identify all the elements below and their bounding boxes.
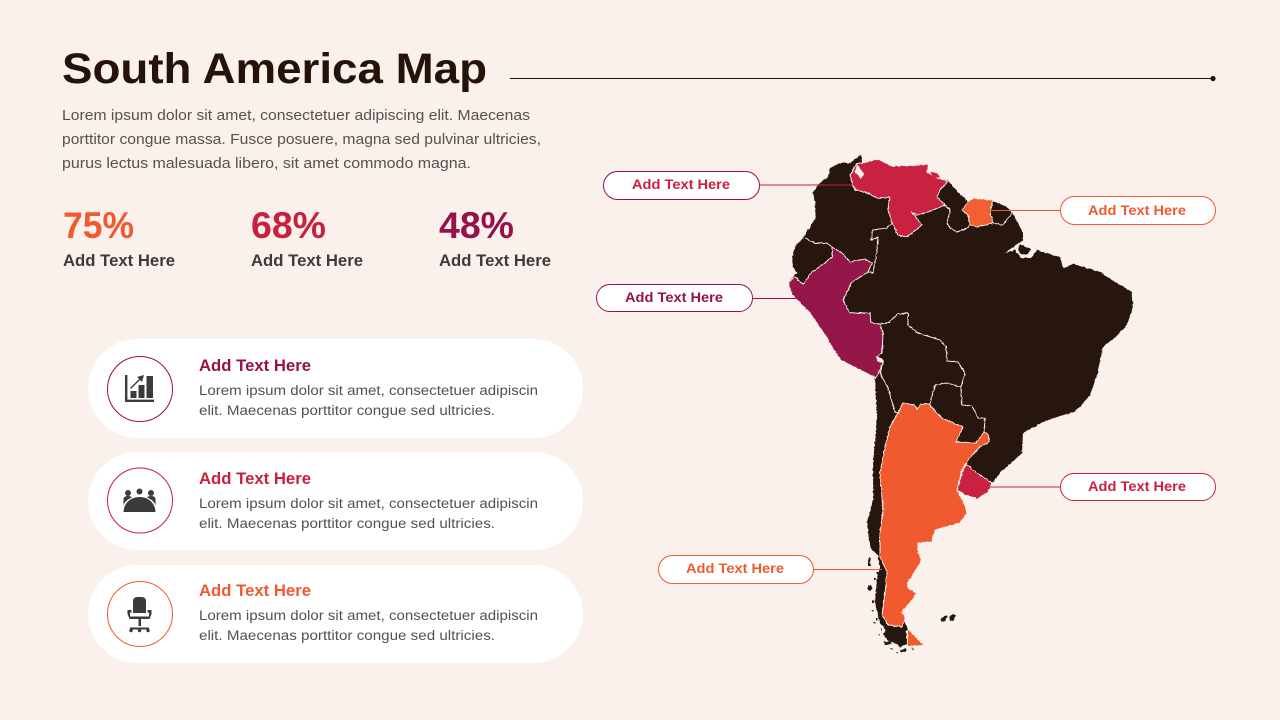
callout: Peru: Add Text Here <box>625 289 723 305</box>
Plate estuary <box>990 470 1003 487</box>
title: South America Map <box>62 45 487 93</box>
callout: Venezuela: Add Text Here <box>632 176 730 192</box>
country: Argentina <box>880 403 989 627</box>
map: South America <box>788 154 1133 654</box>
country borders <box>805 205 1012 432</box>
callout: Argentina <box>658 556 882 584</box>
stat: 68% <box>251 205 363 270</box>
intro paragraph: Lorem ipsum dolor sit amet, consectetuer adipiscing elit. Maecenas <box>62 108 530 124</box>
intro paragraph: purus lectus malesuada libero, sit amet commodo magna. <box>62 156 471 172</box>
Lake Titicaca <box>876 356 884 363</box>
continent silhouette <box>788 154 1133 632</box>
callout: Argentina: Add Text Here <box>686 560 784 576</box>
stat: 75%: 75% <box>63 205 134 246</box>
icon: bar chart <box>108 356 172 422</box>
title rule with end dot <box>510 76 1216 81</box>
card one text: Lorem ipsum dolor sit amet, consectetuer adipiscin <box>199 383 538 398</box>
intro paragraph: porttitor congue massa. Fusce posuere, magna sed pulvinar ultricies, <box>62 132 541 148</box>
intro paragraph <box>62 108 541 172</box>
callout: Suriname <box>991 196 1216 224</box>
southern islands <box>867 557 914 654</box>
country: Peru <box>788 247 883 378</box>
stat: 75% <box>63 205 175 270</box>
card one heading: Add Text Here <box>199 356 311 375</box>
card two text: Lorem ipsum dolor sit amet, consectetuer adipiscin <box>199 496 538 511</box>
stat: 68%: 68% <box>251 205 326 246</box>
Lake Maracaibo <box>855 164 864 179</box>
card two heading: Add Text Here <box>199 469 311 488</box>
stat: 75%: Add Text Here <box>63 251 175 270</box>
Trinidad <box>930 172 940 178</box>
Falkland Islands <box>941 614 956 622</box>
country: Venezuela <box>850 159 948 237</box>
callout: Uruguay <box>990 474 1216 500</box>
country: Suriname <box>962 198 993 227</box>
stat: 48%: 48% <box>439 205 514 246</box>
Tierra del Fuego <box>908 630 923 646</box>
card three text: Lorem ipsum dolor sit amet, consectetuer adipiscin <box>199 608 538 623</box>
card three text <box>199 608 538 643</box>
icon: office chair <box>108 582 172 646</box>
callout: Venezuela <box>604 172 853 200</box>
callout: Peru <box>596 284 803 312</box>
stat: 48%: Add Text Here <box>439 251 551 270</box>
stat: 48% <box>439 205 551 270</box>
card two text <box>199 496 538 531</box>
card three text: elit. Maecenas porttitor congue sed ultricies. <box>199 628 495 643</box>
Marajo island and river mouth <box>1005 240 1037 258</box>
panel: card one <box>88 339 583 438</box>
callout: Uruguay: Add Text Here <box>1088 478 1186 494</box>
card one text: elit. Maecenas porttitor congue sed ultricies. <box>199 403 495 418</box>
card two text: elit. Maecenas porttitor congue sed ultricies. <box>199 516 495 531</box>
panel: card two <box>88 452 583 550</box>
stat: 68%: Add Text Here <box>251 251 363 270</box>
callout: Suriname: Add Text Here <box>1088 202 1186 218</box>
country: Uruguay <box>957 464 992 499</box>
panel: card three <box>88 565 583 663</box>
card three heading: Add Text Here <box>199 581 311 600</box>
card one text <box>199 383 538 418</box>
icon: group of people <box>108 468 172 533</box>
